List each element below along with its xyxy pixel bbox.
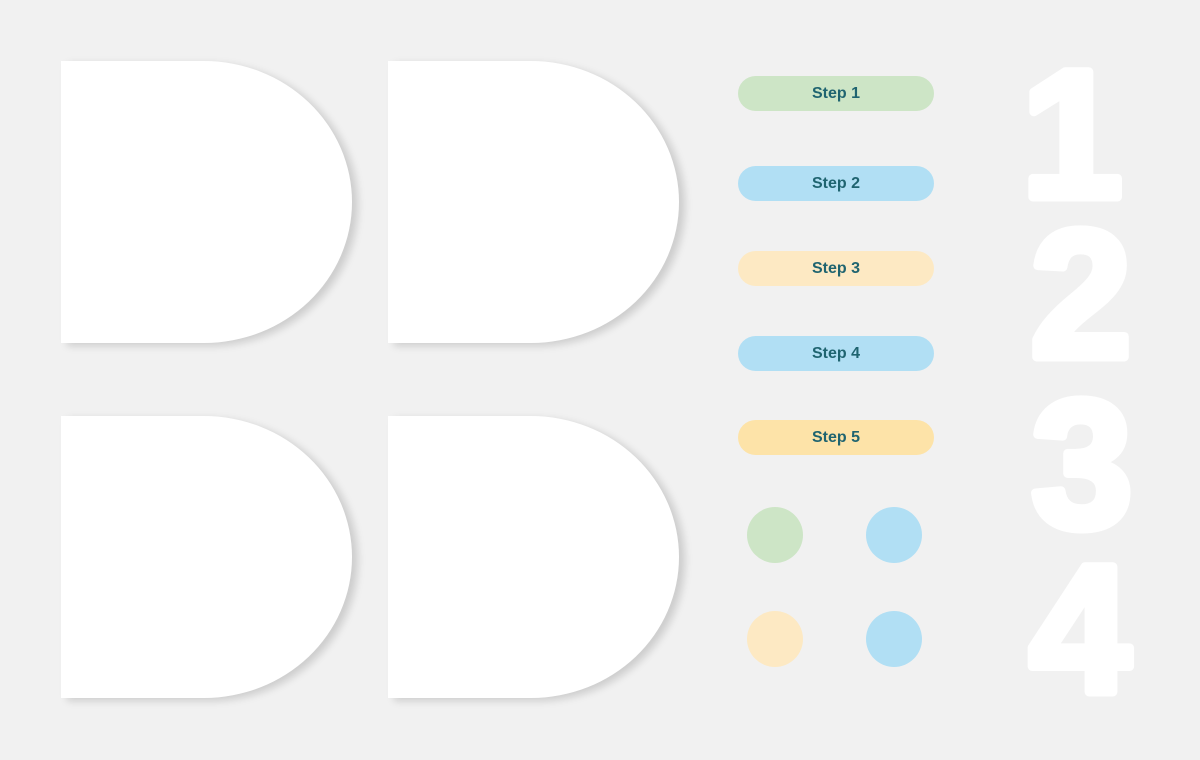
number 1: 1 — [1021, 32, 1123, 236]
panel: bottom-right D shape — [388, 416, 679, 698]
step 2 pill: Step 2 — [812, 175, 860, 192]
step 4 pill: Step 4 — [812, 345, 860, 362]
panel: top-right D shape — [388, 61, 679, 343]
step 3 pill — [738, 251, 934, 286]
number 4: 4 — [1029, 527, 1131, 731]
circle yellow — [747, 611, 803, 667]
panel: top-left D shape — [61, 61, 352, 343]
step 3 pill: Step 3 — [812, 260, 860, 277]
circle blue bottom — [866, 611, 922, 667]
circle green — [747, 507, 803, 563]
step 5 pill — [738, 420, 934, 455]
step 4 pill — [738, 336, 934, 371]
step 1 pill — [738, 76, 934, 111]
step 1 pill: Step 1 — [812, 85, 860, 102]
panel: bottom-left D shape — [61, 416, 352, 698]
number 3: 3 — [1031, 362, 1133, 566]
number 2: 2 — [1030, 192, 1132, 396]
circle blue top — [866, 507, 922, 563]
step 5 pill: Step 5 — [812, 429, 860, 446]
step 2 pill — [738, 166, 934, 201]
